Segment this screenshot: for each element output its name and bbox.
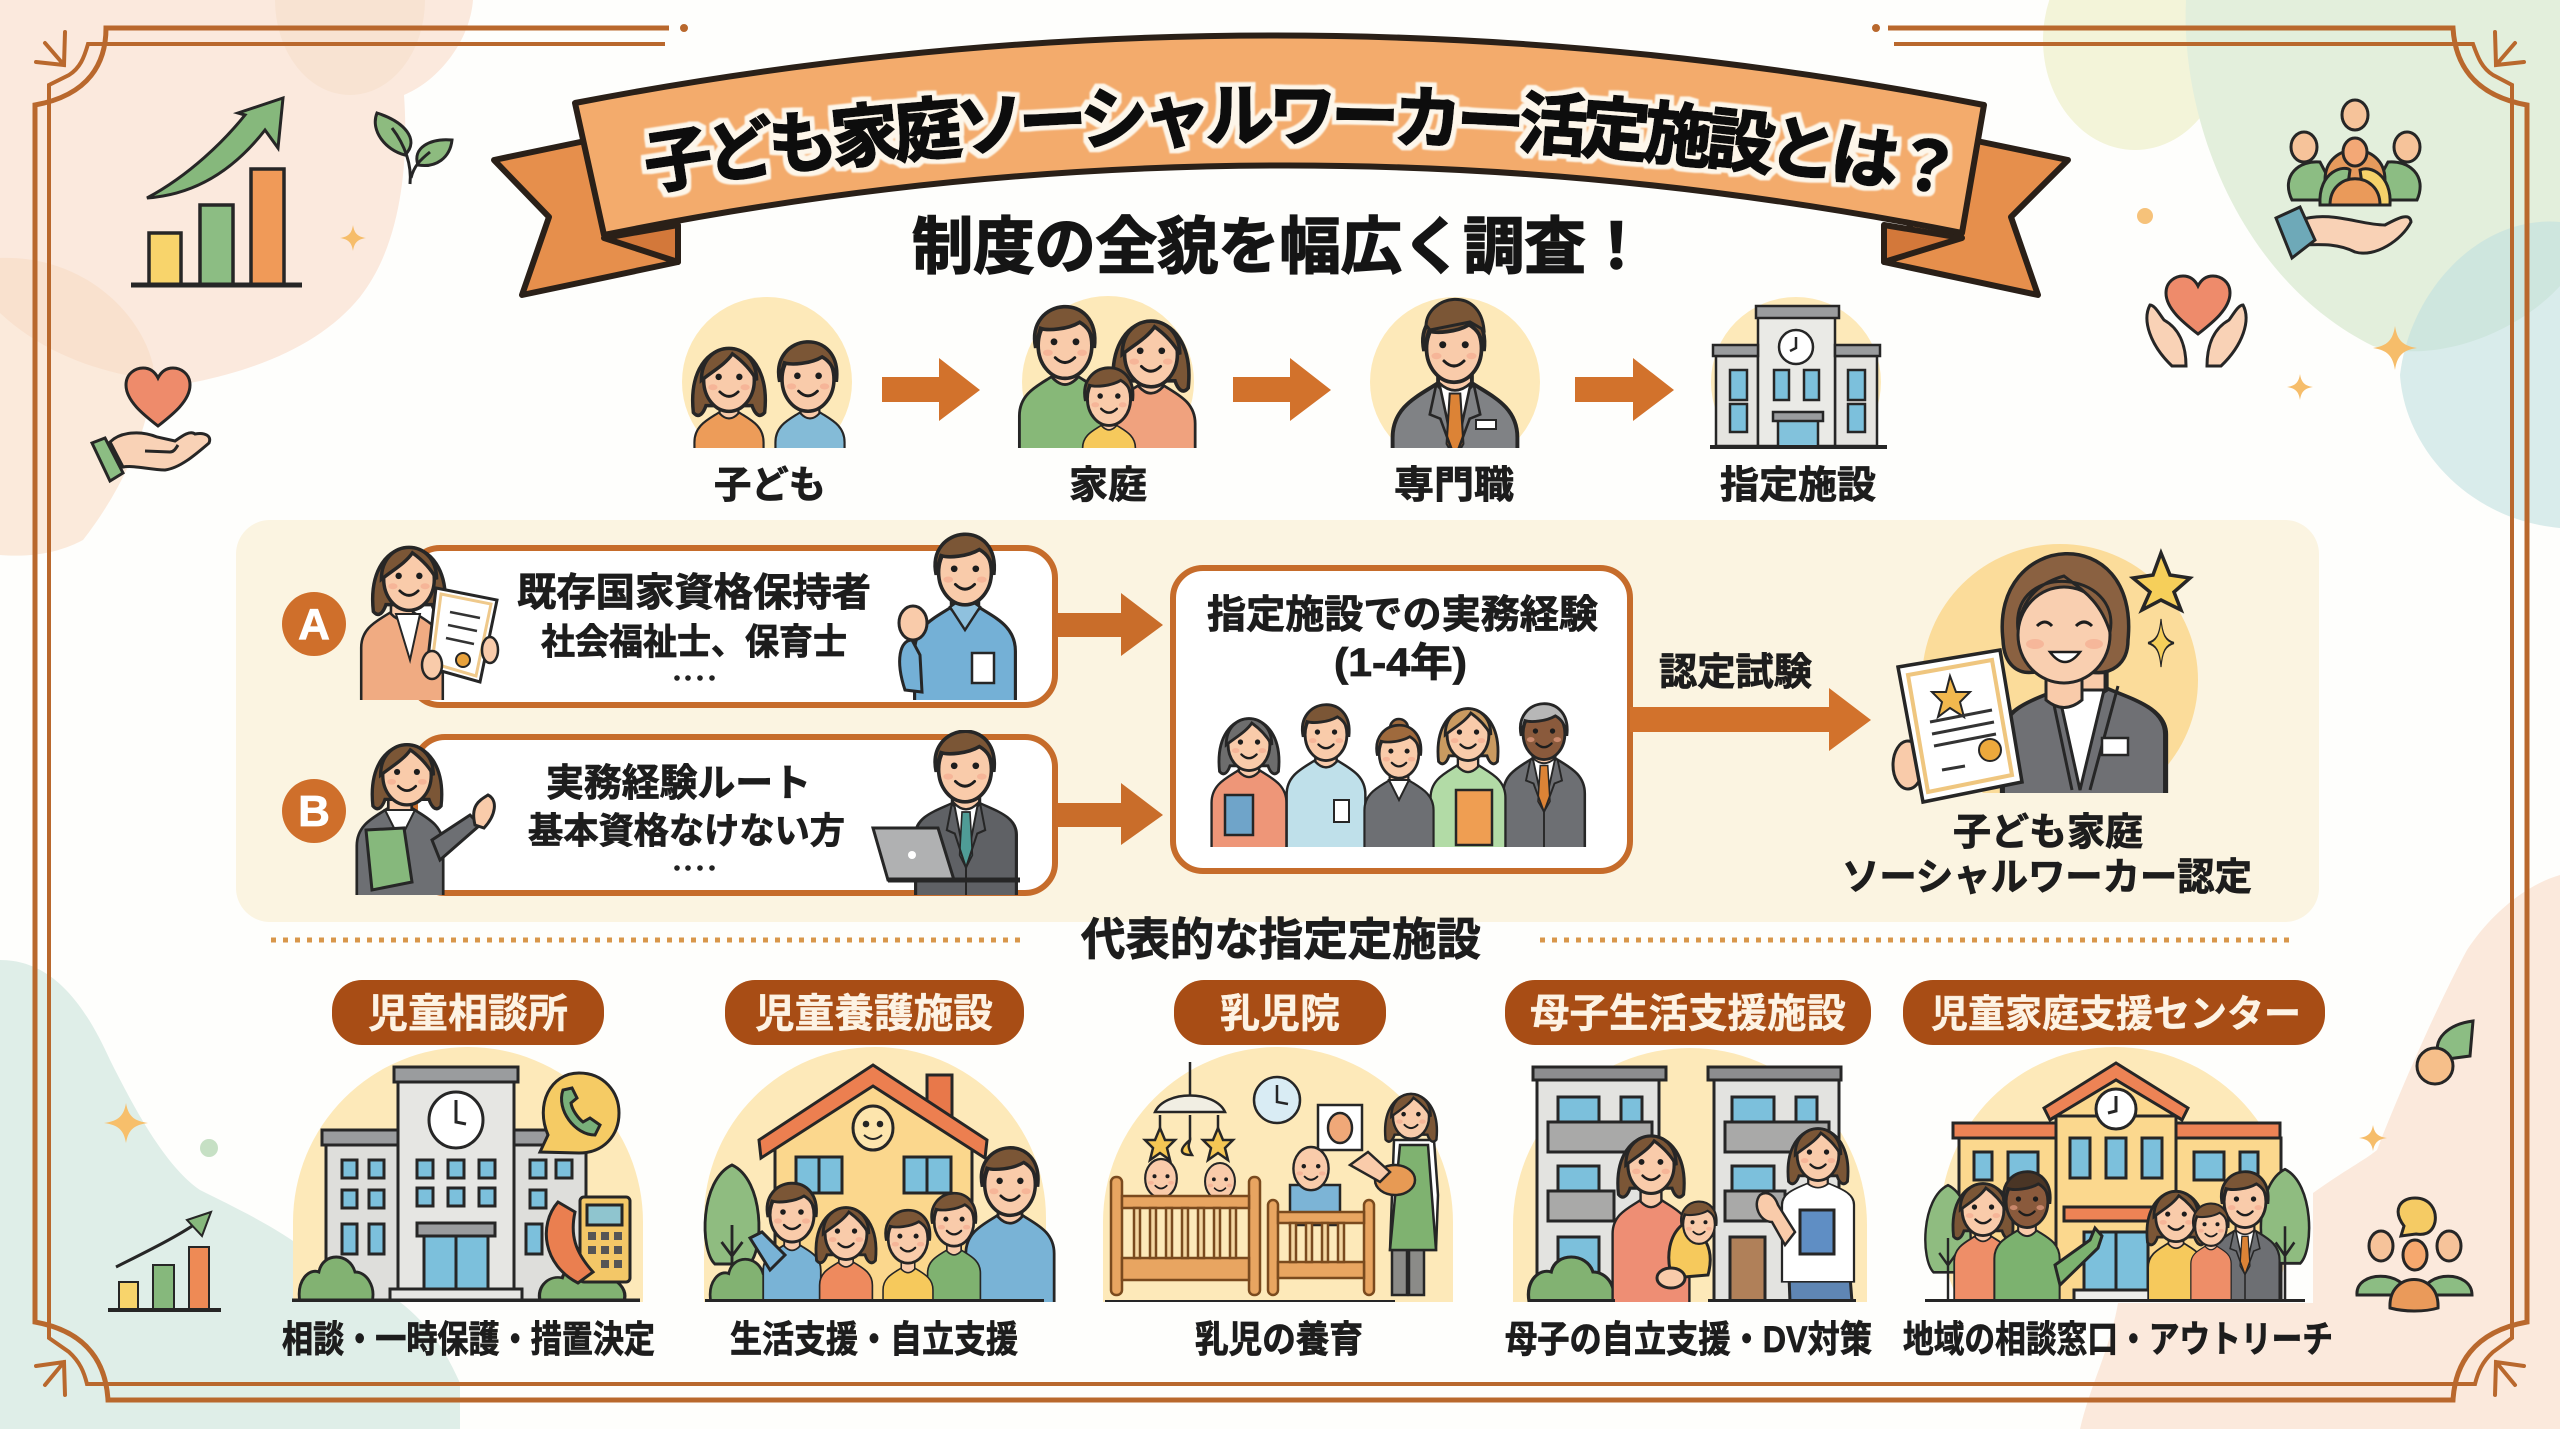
facility 2: children's home <box>704 980 1054 1390</box>
nurse <box>1350 1094 1438 1295</box>
label: family: 家庭 <box>1069 465 1147 507</box>
pill: mother-child facility <box>1505 980 1871 1045</box>
label: professional: 専門職 <box>1394 465 1514 507</box>
label: child: 子ども <box>714 465 826 507</box>
arrow A <box>1056 593 1163 656</box>
badge B <box>282 779 346 843</box>
icon: group on hand <box>2276 100 2420 258</box>
facility 3: infant home <box>1103 980 1453 1397</box>
caption: infant home: 乳児の養育 <box>1195 1319 1363 1360</box>
icon: community chat <box>2357 1198 2472 1311</box>
pill: infant home: 乳児院 <box>1220 992 1340 1036</box>
badge A <box>282 592 346 656</box>
caption: children's home: 生活支援・自立支援 <box>730 1319 1018 1360</box>
mother and baby <box>1611 1192 1691 1302</box>
ribbon right tail <box>1884 140 2068 295</box>
ribbon left tail <box>494 140 678 295</box>
pill: infant home <box>1174 980 1386 1045</box>
pill: family support center: 児童家庭支援センター <box>1931 994 2301 1036</box>
pill: mother-child facility: 母子生活支援施設 <box>1530 992 1846 1036</box>
arrow B <box>1056 783 1163 845</box>
certificate <box>1893 650 2022 802</box>
person: woman with certificate <box>360 546 500 700</box>
label: certification exam: 認定試験 <box>1659 652 1812 694</box>
box B: practical experience route <box>355 730 1058 896</box>
icon: yellow dot <box>2137 208 2153 224</box>
panel: certification route <box>236 520 2319 922</box>
section heading: 代表的な指定定施設 <box>1081 914 1481 965</box>
arrow 2 <box>1233 358 1331 421</box>
subtitle: 制度の全貌を幅広く調査！ <box>912 213 1647 282</box>
icon: heart in hand <box>92 368 210 481</box>
text: certification name: 子ども家庭 <box>1953 812 2143 854</box>
icon: sparkle on certificate <box>2148 619 2174 667</box>
icon: sparkle and dot bottom left <box>104 1103 218 1157</box>
ribbon band <box>575 35 1984 235</box>
facility 5: family support center <box>1903 980 2331 1356</box>
icon: sparkles top right <box>2287 326 2417 400</box>
illustration: cribs and nurse <box>1103 1047 1453 1302</box>
facility 4: mother and child support <box>1505 980 1872 1356</box>
ribbon folds <box>604 225 678 262</box>
arrow 1 <box>882 358 980 421</box>
box A: existing qualification holders <box>360 532 1058 708</box>
text: experience heading: 指定施設での実務経験 <box>1207 594 1598 637</box>
pill: child guidance center: 児童相談所 <box>368 992 568 1036</box>
illustration: apartments, mother and staff <box>1513 1048 1867 1302</box>
flow: professional <box>1370 297 1540 502</box>
text: route A detail: 社会福祉士、保育士 <box>541 621 847 662</box>
arrow 3 <box>1575 358 1674 421</box>
pill: children's home <box>725 980 1024 1045</box>
illustration: house and children <box>704 1047 1056 1302</box>
flow: facility <box>1710 297 1887 507</box>
illustration: school-like building and families <box>1924 1047 2310 1302</box>
icon: leaves <box>375 113 452 184</box>
icon: fruit and leaf <box>2417 1021 2473 1084</box>
icon: heart in two hands <box>2147 276 2246 366</box>
flow: child <box>682 297 852 502</box>
illustration: office and phone <box>292 1047 643 1302</box>
title: 子ども家庭ソーシャルワーカー活定施設とは？ <box>640 81 1954 198</box>
caption: child guidance center: 相談・一時保護・措置決定 <box>282 1319 655 1360</box>
facility 1: child guidance center <box>282 980 655 1397</box>
badge B: B <box>298 787 330 836</box>
pill: children's home: 児童養護施設 <box>755 992 993 1036</box>
pill: family support center <box>1903 980 2325 1045</box>
label: facility: 指定施設 <box>1720 465 1876 507</box>
group of staff <box>1210 702 1586 847</box>
person: man with laptop <box>871 730 1020 895</box>
title ribbon <box>494 35 2068 295</box>
icon: sparkle top left <box>340 225 366 251</box>
text: route B ellipsis <box>674 865 715 871</box>
text: experience years: (1-4年) <box>1334 641 1467 685</box>
text: route A heading: 既存国家資格保持者 <box>517 572 871 615</box>
certified social worker <box>1842 544 2252 899</box>
caption: family support center: 地域の相談窓口・アウトリーチ <box>1903 1319 2333 1360</box>
icon: sparkle bottom right <box>2359 1125 2387 1151</box>
flow: family <box>1018 296 1197 502</box>
staff <box>1788 1282 1854 1299</box>
text: route A ellipsis <box>674 675 715 681</box>
text: route B detail: 基本資格なけない方 <box>528 810 845 851</box>
icon: star <box>2133 553 2190 610</box>
caption: mother-child facility: 母子の自立支援・DV対策 <box>1505 1319 1872 1360</box>
pill: child guidance center <box>332 980 604 1045</box>
section divider dots <box>271 938 2290 942</box>
person: man in blue <box>898 532 1017 700</box>
arrow: exam to certification <box>1630 688 1871 751</box>
text: certification name line 2: ソーシャルワーカー認定 <box>1842 857 2252 899</box>
text: route B heading: 実務経験ルート <box>546 763 811 805</box>
mobile <box>1160 1062 1218 1140</box>
box: practical experience at designated facility <box>1170 565 1633 874</box>
icon: rising bar chart <box>131 98 302 285</box>
badge A: A <box>298 600 330 649</box>
person: woman with folder <box>355 743 496 895</box>
icon: small bar chart <box>108 1212 221 1310</box>
